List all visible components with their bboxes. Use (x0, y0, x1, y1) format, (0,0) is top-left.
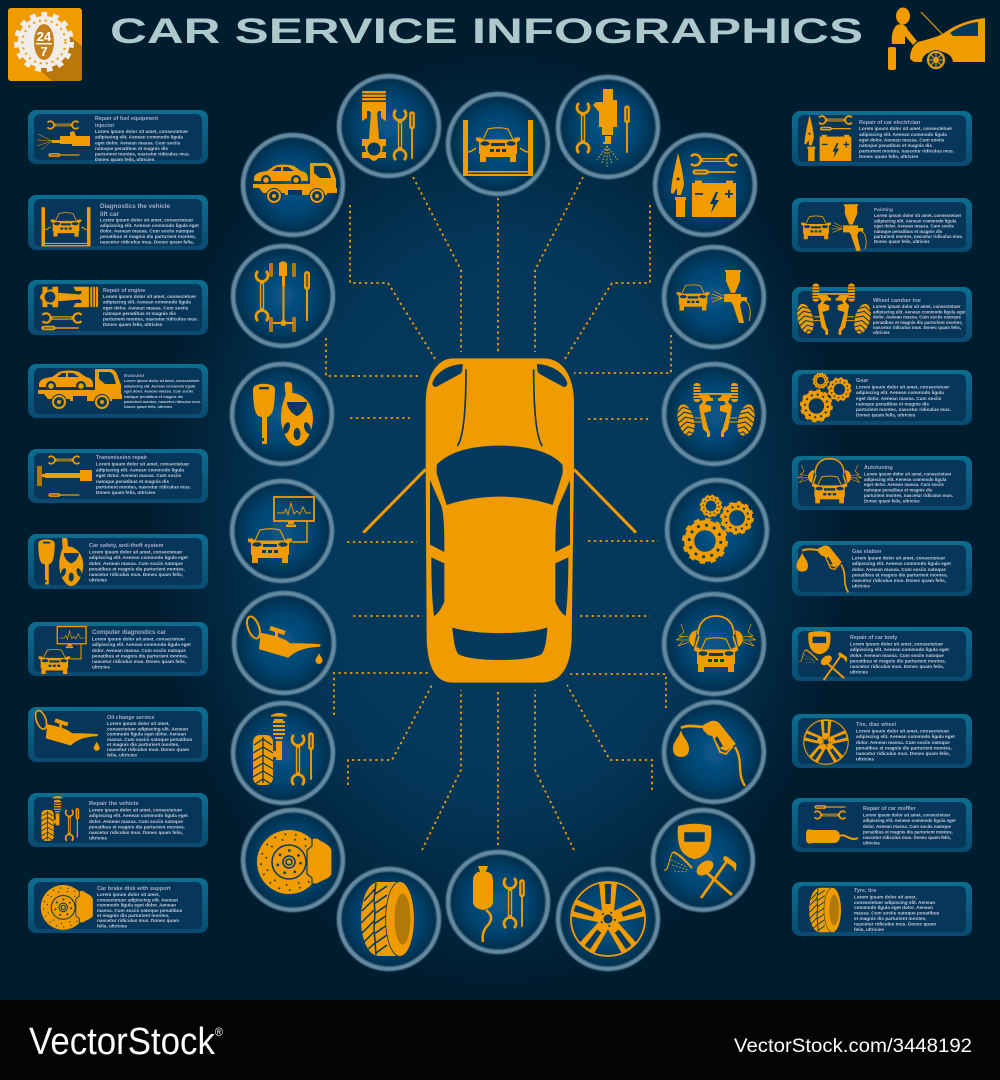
text block: Autotuning (864, 465, 893, 471)
circle icon: battery, clamp and tools (655, 135, 755, 235)
card: gas station: Lorem ipsum dolor sit amet, consectetuer (852, 556, 945, 561)
card: gear: natoque penatibus et magnis dis (856, 401, 929, 406)
circle icon: fuel injector and tools (558, 77, 658, 177)
card: diagnostics the vehicle: Lorem ipsum dolor sit amet, consectetuer (100, 218, 193, 222)
card: transmission repair: parturient montes, nascetur ridiculus mus. (96, 484, 191, 490)
card: oil change service: felis, ultricies (107, 752, 137, 757)
card: transmission repair: natoque penatibus et magnis dis (96, 479, 169, 484)
header icon: 24/7 gear badge: 24 (37, 29, 52, 44)
card: gas station (792, 541, 972, 596)
icon: gears (801, 373, 850, 421)
card: repair of car electrician: Donec quam felis, ultricies (859, 154, 919, 159)
card: painting: Donec quam felis, ultricies (874, 239, 930, 244)
card: repair of car body: adipiscing elit. Aenean commodo ligula eget (850, 647, 949, 652)
icon: tow truck (38, 369, 122, 410)
card: oil change service: nascetur ridiculus mus. Donec quam (107, 747, 189, 752)
card: repair of engine: eget dolor. Aenean massa. Cum sociis (103, 305, 189, 310)
card: transmission repair (28, 449, 208, 503)
circle icon: alloy wheel (558, 869, 658, 969)
card: gas station: dolor. Aenean massa. Cum sociis natoque (852, 567, 946, 572)
card: painting: Lorem ipsum dolor sit amet, consectetuer (874, 213, 962, 218)
card: repair the vehicle (28, 793, 208, 847)
icon: oil can (33, 709, 100, 751)
card: repair the vehicle: ultricies (89, 836, 107, 841)
text block: Evacutor (124, 373, 145, 379)
central car top view (363, 358, 636, 683)
circle icon: oil can (234, 593, 334, 693)
card: diagnostics the vehicle: nascetur ridiculus mus. Donec quam felis, (100, 240, 194, 244)
text block: Repair of fuel equipment (95, 116, 158, 122)
card: autotuning: parturient montes, nascetur ridiculus mus. (864, 493, 953, 498)
card: car safety (28, 534, 208, 589)
card: tire, diac wheel: nascetur ridiculus mus. Donec quam felis, (856, 751, 950, 756)
card: transmission repair: Donec quam felis, ultricies (96, 490, 156, 495)
card: wheel camber toe (792, 284, 972, 342)
text block: Gas station (852, 549, 881, 555)
card: repair of engine: Donec quam felis, ultricies (103, 322, 163, 327)
car body (426, 358, 574, 683)
card: tyre, tire: et magnis dis parturient montes, (854, 916, 926, 921)
card: autotuning (792, 456, 972, 510)
card: repair of car body: penatibus et magnis dis parturient montes, (850, 658, 946, 663)
card: repair of car electrician: natoque penatibus et magnis dis (859, 143, 932, 148)
circle icon: key and alarm fob (232, 364, 332, 464)
right info cards (792, 111, 972, 936)
card: painting: eget dolor. Aenean massa. Cum sociis (874, 224, 954, 229)
card: repair of car electrician: adipiscing elit. Aenean commodo ligula (859, 132, 947, 137)
header icon: 24/7 gear badge (8, 8, 82, 81)
card: tire, diac wheel: ultricies (856, 757, 874, 762)
card: diagnostics the vehicle: dolor. Aenean massa. Cum sociis natoque (100, 228, 194, 234)
card: car brake disk: massa. Cum sociis natoque penatibus (97, 908, 183, 913)
card: transmission repair: eget dolor. Aenean massa. Cum sociis (96, 473, 182, 478)
card: diagnostics the vehicle: lift car (100, 211, 119, 218)
icon: muffler and tools (806, 805, 858, 844)
card: painting (792, 198, 972, 252)
card: repair of engine (28, 280, 208, 335)
text block: Painting (874, 207, 893, 213)
card: wheel camber toe: adipiscing elit. Aenean commodo ligula eget (873, 309, 966, 314)
footer logo: ® (215, 1025, 223, 1039)
title: CAR SERVICE INFOGRAPHICS (110, 12, 863, 51)
icon: clamp and battery (805, 115, 852, 161)
card: painting: parturient montes, nascetur ridiculus mus. (874, 234, 963, 239)
card: oil change service: massa. Cum sociis natoque penatibus (107, 737, 193, 742)
card: tyre, tire: consectetuer adipiscing elit. Aenean (854, 900, 935, 905)
card: repair of car muffler: dolor. Aenean massa. Cum sociis natoque (863, 824, 951, 829)
windshield (437, 446, 563, 505)
text block: Gear (856, 378, 869, 384)
header icon: 24/7 gear badge: 7 (40, 44, 48, 59)
card: repair of car muffler: ultricies (863, 841, 880, 846)
card: tire, diac wheel (792, 714, 972, 768)
card: painting: adipiscing elit. Aenean commodo ligula (874, 218, 957, 223)
card: repair of car body (792, 627, 972, 681)
card: autotuning: Donec quam felis, ultricies (864, 498, 920, 503)
text block: Repair of engine (103, 288, 145, 294)
card: evacutor: Lorem ipsum dolor sit amet, consectetuer (124, 379, 200, 383)
icon: transmission and tools (37, 456, 92, 497)
card: repair of fuel equipment: adipiscing elit. Aenean commodo ligula (95, 135, 183, 140)
card: repair of fuel equipment: Donec quam felis, ultricies (95, 157, 155, 162)
card: gas station: nascetur ridiculus mus. Donec quam felis, (852, 578, 946, 583)
card: evacutor (28, 364, 208, 418)
card: wheel camber toe: penatibus et magnis dis parturient montes, (873, 320, 963, 325)
card: tire, diac wheel: Lorem ipsum dolor sit amet, consectetuer (856, 729, 949, 734)
card: oil change service: et magnis dis parturient montes, (107, 742, 179, 747)
text block: Repair of car muffler (863, 806, 917, 812)
card: repair of car muffler: nascetur ridiculus mus. Donec quam felis, (863, 835, 951, 840)
card: repair of engine: Lorem ipsum dolor sit amet, consectetuer (103, 294, 196, 299)
circle icon: autotuning car (664, 594, 764, 694)
circle icon: tow truck (243, 135, 343, 235)
circle icon: welding mask and hammers (653, 810, 753, 910)
text block: Tire, diac wheel (856, 722, 897, 728)
card: repair the vehicle: dolor. Aenean massa. Cum sociis natoque (89, 819, 183, 824)
card: tyre, tire (792, 882, 972, 936)
card: oil change service: consectetuer adipiscing elit. Aenean (107, 726, 188, 731)
card: gear: parturient montes, nascetur ridiculus mus. (856, 407, 951, 412)
card: gas station: adipiscing elit. Aenean commodo ligula eget (852, 561, 951, 566)
card: car safety: adipiscing elit. Aenean commodo ligula eget (89, 555, 188, 560)
card: computer diagnostics: nascetur ridiculus mus. Donec quam felis, (92, 659, 186, 664)
card: evacutor: Donec quam felis, ultricies (124, 405, 172, 409)
card: gear (792, 370, 972, 425)
card: gear: adipiscing elit. Aenean commodo ligula (856, 390, 944, 395)
circle icon: piston and tools (339, 76, 439, 176)
text block: Diagnostics the vehicle (100, 203, 170, 210)
icon: welding mask and hammers (799, 631, 847, 680)
card: oil change service: commodo ligula eget dolor. Aenean (107, 732, 186, 737)
card: diagnostics the vehicle: penatibus et magnis dis parturient montes, (100, 234, 196, 239)
header icon: mechanic and car (888, 8, 985, 70)
circle icon: spray painting (664, 247, 764, 347)
card: repair of engine: parturient montes, nascetur ridiculus mus. (103, 316, 198, 322)
icon: car on lift (42, 207, 90, 246)
card: repair the vehicle: nascetur ridiculus mus. Donec quam felis, (89, 830, 183, 835)
circle icon: car on lift (448, 94, 548, 194)
card: car safety: nascetur ridiculus mus. Donec quam felis, (89, 572, 183, 577)
circle icon: computer diagnostics (232, 481, 332, 581)
card: computer diagnostics (28, 622, 208, 676)
circle icon: tire, shock and tools (233, 703, 333, 803)
card: car brake disk: felis, ultricies (97, 923, 127, 928)
card: tyre, tire: nascetur ridiculus mus. Donec quam (854, 921, 936, 926)
card: evacutor: adipiscing elit. Aenean commodo ligula (124, 384, 196, 388)
card: repair of car muffler: penatibus et magnis dis parturient montes, (863, 829, 953, 834)
card: evacutor: parturient montes, nascetur ridiculus mus. (124, 400, 201, 404)
card: repair of fuel equipment: injector (95, 123, 115, 129)
text block: Repair the vehicle (89, 801, 139, 807)
card: tire, diac wheel: penatibus et magnis dis parturient montes, (856, 745, 952, 750)
card: repair of car electrician: parturient montes, nascetur ridiculus mus. (859, 149, 954, 154)
circle icon: muffler and tools (448, 852, 548, 952)
card: car brake disk: consectetuer adipiscing elit. Aenean (97, 897, 178, 902)
card: autotuning: Lorem ipsum dolor sit amet, consectetuer (864, 471, 952, 476)
card: repair of fuel equipment: natoque penatibus et magnis dis (95, 146, 168, 151)
text block: Repair of car electrician (859, 120, 920, 126)
card: repair of fuel equipment (28, 110, 208, 164)
dotted connector lines (326, 177, 671, 850)
card: diagnostics the vehicle (28, 195, 208, 250)
card: evacutor: natoque penatibus et magnis dis (124, 395, 183, 399)
icon: alloy wheel (804, 720, 848, 764)
card: tire, diac wheel: dolor. Aenean massa. Cum sociis natoque (856, 740, 950, 745)
card: car brake disk: commodo ligula eget dolor. Aenean (97, 903, 176, 908)
card: repair the vehicle: Lorem ipsum dolor sit amet, consectetuer (89, 808, 182, 813)
card: repair of car muffler: Lorem ipsum dolor sit amet, consectetuer (863, 813, 951, 818)
card: repair of fuel equipment: Lorem ipsum dolor sit amet, consectetuer (95, 129, 188, 134)
card: car brake disk: nascetur ridiculus mus. Donec quam (97, 918, 179, 923)
car doors open lines (363, 469, 636, 533)
card: computer diagnostics: dolor. Aenean massa. Cum sociis natoque (92, 648, 186, 653)
card: tire, diac wheel: adipiscing elit. Aenean commodo ligula eget (856, 734, 955, 739)
car windows, lights and hood lines (430, 364, 570, 660)
icon: wheel camber (794, 284, 873, 335)
card: tyre, tire: felis, ultricies (854, 927, 884, 932)
circle icon: gears (667, 480, 767, 580)
text block: Transmission repair (96, 455, 148, 461)
card: transmission repair: adipiscing elit. Aenean commodo ligula (96, 467, 184, 472)
card: repair of car muffler (792, 798, 972, 852)
card: repair of car body: nascetur ridiculus mus. Donec quam felis, (850, 664, 944, 669)
card: car safety: Lorem ipsum dolor sit amet, consectetuer (89, 550, 182, 555)
circle icon: brake disc (243, 810, 343, 910)
service circles ring (232, 76, 767, 969)
text block: Oil change service (107, 715, 155, 721)
card: repair the vehicle: adipiscing elit. Aenean commodo ligula eget (89, 813, 188, 818)
card: painting: natoque penatibus et magnis dis (874, 229, 943, 234)
icon: injector and tools (37, 121, 90, 157)
text block: Wheel camber toe (873, 298, 921, 304)
icon: fuel nozzle (796, 546, 848, 592)
circle icon: tire (339, 869, 439, 969)
text block: Car safety, anti-theft system (89, 543, 164, 549)
left info cards (28, 110, 208, 933)
card: repair of car body: dolor. Aenean massa. Cum sociis natoque (850, 653, 944, 658)
card: oil change service: Lorem ipsum dolor sit amet, (107, 721, 170, 726)
card: repair of car body: Lorem ipsum dolor sit amet, consectetuer (850, 642, 943, 647)
circle icon: wheel camber (664, 364, 764, 464)
card: car brake disk (28, 878, 208, 933)
card: wheel camber toe: dolor. Aenean massa. Cum sociis natoque (873, 315, 961, 320)
icon: key and fob (38, 538, 83, 586)
footer band (0, 1000, 1000, 1080)
card: wheel camber toe: ultricies (873, 330, 890, 335)
card: repair of car body: ultricies (850, 670, 868, 675)
card: repair of fuel equipment: parturient montes, nascetur ridiculus mus. (95, 152, 190, 156)
card: repair of car muffler: adipiscing elit. Aenean commodo ligula eget (863, 818, 956, 823)
card: autotuning: eget dolor. Aenean massa. Cum sociis (864, 482, 944, 487)
text block: Computer diagnostics car (92, 630, 167, 636)
card: autotuning: adipiscing elit. Aenean commodo ligula (864, 477, 947, 482)
card: gear: Lorem ipsum dolor sit amet, consectetuer (856, 385, 949, 390)
icon: autotuning car (798, 459, 862, 503)
card: repair of car electrician (792, 111, 972, 166)
card: repair of engine: natoque penatibus et magnis dis (103, 311, 176, 316)
card: repair the vehicle: penatibus et magnis dis parturient montes, (89, 824, 185, 829)
icon: computer and car (39, 627, 86, 674)
card: car brake disk: et magnis dis parturient montes, (97, 913, 169, 918)
card: gas station: penatibus et magnis dis parturient montes, (852, 572, 948, 577)
card: computer diagnostics: Lorem ipsum dolor sit amet, consectetuer (92, 637, 185, 642)
icon: car and spray gun (801, 204, 866, 251)
card: computer diagnostics: ultricies (92, 665, 110, 670)
card: car safety: ultricies (89, 578, 107, 583)
card: gear: eget dolor. Aenean massa. Cum sociis (856, 396, 942, 401)
icon: piston, wrench and screwdriver (40, 287, 98, 330)
card: autotuning: natoque penatibus et magnis dis (864, 488, 933, 493)
text block: Car brake disk with support (97, 886, 171, 892)
card: wheel camber toe: nascetur ridiculus mus. Donec quam felis, (873, 325, 961, 330)
card: tyre, tire: Lorem ipsum dolor sit amet, (854, 894, 917, 899)
card: car brake disk: Lorem ipsum dolor sit amet, (97, 892, 160, 897)
card: diagnostics the vehicle: adipiscing elit. Aenean commodo ligula eget (100, 223, 199, 228)
card: repair of car electrician: Lorem ipsum dolor sit amet, consectetuer (859, 126, 952, 131)
card: computer diagnostics: penatibus et magnis dis parturient montes, (92, 653, 188, 658)
icon: tire (809, 888, 841, 932)
circle icon: transmission and tools (233, 246, 333, 346)
text block: Repair of car body (850, 635, 897, 641)
card: transmission repair: Lorem ipsum dolor sit amet, consectetuer (96, 462, 189, 467)
card: tyre, tire: massa. Cum sociis natoque penatibus (854, 911, 940, 916)
footer image id: VectorStock.com/3448192 (734, 1035, 972, 1057)
card: repair of fuel equipment: eget dolor. Aenean massa. Cum sociis (95, 140, 181, 145)
icon: tire, shock and tools (41, 796, 79, 841)
card: repair of engine: adipiscing elit. Aenean commodo ligula (103, 300, 191, 305)
card: tyre, tire: commodo ligula eget dolor. Aenean (854, 905, 933, 910)
card: evacutor: eget dolor. Aenean massa. Cum sociis (124, 390, 193, 394)
footer logo: VectorStock (29, 1021, 232, 1063)
card: repair of car electrician: eget dolor. Aenean massa. Cum sociis (859, 137, 945, 142)
card: wheel camber toe: Lorem ipsum dolor sit amet, consectetuer (873, 304, 961, 309)
card: car safety: penatibus et magnis dis parturient montes, (89, 566, 185, 571)
card: car safety: dolor. Aenean massa. Cum sociis natoque (89, 561, 183, 566)
card: computer diagnostics: adipiscing elit. Aenean commodo ligula eget (92, 642, 191, 647)
circle icon: fuel nozzle (664, 702, 764, 802)
card: gear: Donec quam felis, ultricies (856, 413, 916, 418)
icon: brake disc (41, 885, 93, 930)
text block: Tyre, tire (854, 888, 876, 894)
card: gas station: ultricies (852, 584, 870, 589)
card: oil change service (28, 707, 208, 762)
